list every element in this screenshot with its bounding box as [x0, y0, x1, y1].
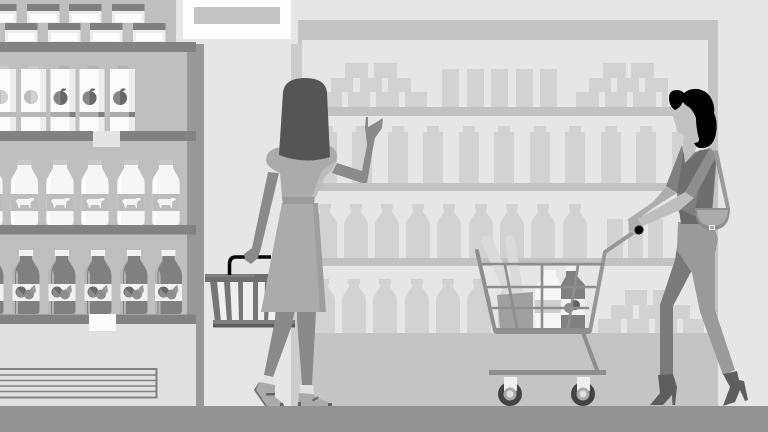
top shelf boxes	[0, 4, 166, 42]
far arm	[627, 187, 677, 224]
near arm	[628, 192, 694, 228]
paper bag	[497, 292, 533, 328]
price tag lower	[89, 314, 116, 331]
back leg	[660, 240, 692, 375]
hand on cart	[629, 219, 644, 235]
vent grille	[0, 369, 156, 398]
dress bodice	[266, 146, 337, 197]
dark hair	[669, 89, 717, 148]
belt	[679, 209, 712, 224]
front leg	[264, 310, 295, 377]
milk bottle in cart	[535, 270, 562, 328]
price tag upper	[93, 131, 120, 147]
arm holding basket	[244, 172, 279, 264]
back leg	[297, 312, 316, 385]
floor	[0, 406, 768, 432]
background top shelf stacked boxes left	[325, 63, 427, 107]
background third row bottles	[313, 204, 663, 258]
cart frame	[477, 230, 637, 370]
milk bottles	[0, 160, 180, 225]
shirt	[666, 145, 717, 218]
cart grip ball	[634, 226, 644, 234]
background top shelf packages middle	[442, 69, 557, 107]
dress skirt	[261, 203, 326, 312]
shoes	[254, 375, 332, 406]
raised arm	[332, 117, 383, 183]
background shelving unit	[291, 20, 718, 406]
boots	[650, 371, 748, 406]
background bottom row boxes	[598, 290, 704, 333]
shopping cart	[477, 230, 637, 406]
cart base	[489, 370, 606, 375]
left shelf unit	[0, 0, 204, 406]
neck and face	[673, 102, 699, 163]
shelf boards	[0, 42, 196, 324]
juice cartons	[0, 66, 135, 131]
background second row bottles	[317, 126, 692, 183]
near sleeve	[685, 148, 717, 198]
shoulder bag	[695, 150, 730, 230]
background top shelf stacked boxes right	[576, 63, 668, 107]
basket	[205, 257, 295, 328]
wheel left	[498, 377, 522, 406]
dress belt	[282, 197, 315, 204]
woman with basket	[205, 78, 383, 406]
long dark hair	[279, 78, 330, 161]
baguettes	[487, 240, 518, 292]
background shelf boards	[302, 107, 708, 266]
hanging sign	[176, 0, 298, 44]
juice bottle in cart	[561, 266, 585, 328]
front leg	[677, 222, 735, 375]
background bottom row bottles	[311, 279, 522, 333]
wheel right	[571, 377, 595, 406]
woman with cart	[627, 89, 748, 406]
dark juice bottles	[0, 250, 182, 314]
